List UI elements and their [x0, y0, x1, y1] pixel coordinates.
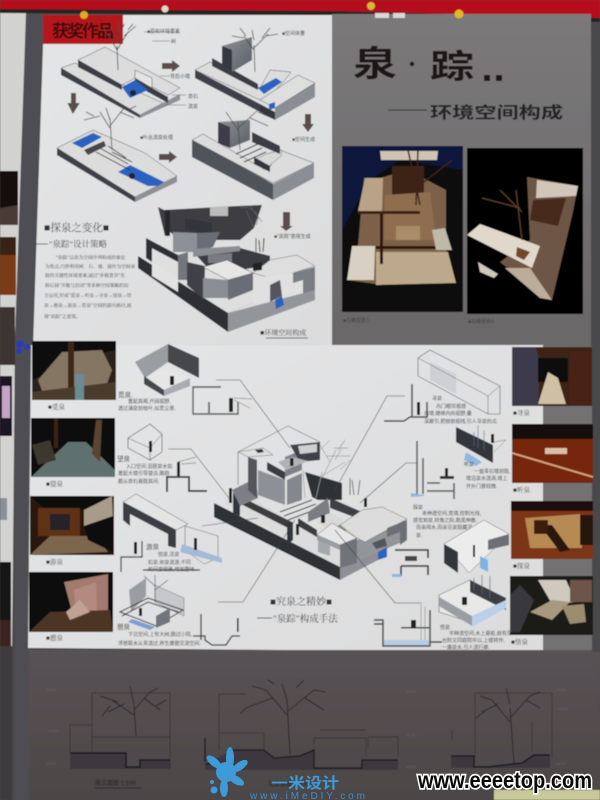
vignette: 望泉: 置起大墙引导望点,路趋 — [118, 470, 169, 477]
vignette: 听泉: 听泉 — [464, 461, 474, 468]
subtitle: 环境空间构成 — [430, 103, 563, 122]
vignette: 寻泉: 内墙,继续内向视野,叠 — [424, 410, 472, 417]
left photo captions: ■觅泉 — [48, 402, 65, 411]
vignette: 游泉 — [121, 494, 222, 573]
right photo captions: ■悟泉 — [511, 637, 528, 646]
vignette: 悟泉: 半种流空间,水上悬桩,前有深 — [449, 630, 512, 637]
grey chips beside the right photos — [543, 346, 593, 650]
vignette: 游泉: 悦泉,活泉 — [158, 551, 179, 558]
left photo captions: ■望泉 — [46, 479, 63, 488]
left photo captions: ■游泉 — [46, 557, 63, 566]
elevation 2 — [205, 680, 398, 788]
vignette: 悟泉: 台阶又同庭院中以,上楼转作, — [442, 637, 505, 644]
right photo captions: ■听泉 — [513, 485, 530, 494]
central axonometric model — [214, 426, 407, 580]
photo: bird's-eye model 4 — [467, 148, 583, 314]
level annotations: ±2.60 — [406, 732, 417, 737]
level annotations: ±5.00 — [406, 689, 417, 694]
level annotations: ±5.00 — [556, 687, 567, 692]
watermark: 一米设计: 一米设计 — [271, 775, 339, 792]
level annotations: ±3.60 — [558, 706, 569, 711]
arrow down 2 — [302, 114, 314, 132]
diagram 4: volume generated — [192, 110, 315, 200]
strategy paragraph: 现"泉踪"之意境。 — [44, 313, 81, 320]
white lower board — [28, 345, 543, 652]
diagram 2: space volume — [195, 28, 315, 120]
vignette: 望泉: 入口空间,泪居泉水如 — [126, 463, 172, 470]
pins — [16, 2, 464, 354]
award label — [43, 15, 123, 44]
vignette: 寻泉: 内门眼帘视感 — [436, 403, 466, 410]
vignette: 望泉: 望泉 — [117, 454, 130, 463]
right wall strip — [592, 22, 600, 652]
vignette: 听泉 — [456, 425, 510, 490]
vignette: 游泉: 游泉 — [146, 542, 160, 551]
white upper board — [33, 15, 332, 346]
annotations of diagram 1: 树 — [171, 38, 176, 45]
caption: 环境空间构成: ■环境空间构成 — [260, 328, 306, 337]
vignette: 憩泉: 浮想联水从青流过,养生康憩交流空间. — [118, 640, 201, 647]
photo: 探泉 — [511, 501, 593, 559]
level annotations — [46, 687, 569, 769]
label: 意境生成: ■"泉踪"意境生成 — [274, 233, 311, 240]
vignette: 听泉: 墙沿泉水流淌,墙上 — [466, 475, 507, 482]
level annotations: ±5.00 — [46, 687, 57, 692]
vignette: 觅泉 — [118, 344, 252, 414]
vignette: 望泉: 都从奇石悬隐其间. — [118, 478, 159, 485]
vignette: 寻泉: 寻泉 — [432, 395, 442, 402]
left photo captions — [46, 402, 65, 642]
vignette: 悟泉 — [374, 575, 512, 651]
photo: 悟泉 — [510, 576, 593, 635]
level annotations: ±3.60 — [48, 728, 59, 733]
diagram 3: site with steps and pool — [57, 106, 177, 202]
vignette: 听泉: 一面青石墙前隐, — [474, 468, 510, 475]
vignette: 探泉 section: 而亲闻水,而亲见泉隐藏灵 — [416, 524, 472, 531]
elevation 3 — [451, 688, 552, 768]
paper tag on top of panel — [375, 13, 405, 18]
level annotations: ±0.00 — [556, 761, 567, 766]
annotations of diagram 1: 背后小墙 — [170, 73, 190, 80]
heading: 探泉之变化: ■探泉之变化■ — [44, 221, 109, 234]
title: 泉 — [353, 45, 397, 84]
vignette: 觅泉: 置起高阁,开阔视野, — [128, 398, 171, 405]
vignette: 探泉 axonometric — [444, 520, 509, 573]
vignette: 寻泉: 深廊引,把前前视线,引人寻泉的点. — [424, 418, 498, 425]
photo: 望泉 — [31, 418, 115, 477]
yellow note at bottom right — [494, 790, 600, 800]
strategy paragraph: "泉踪"以泉为空间序列构成的象征 — [56, 254, 126, 261]
captions: model views — [343, 317, 494, 325]
vignette: 憩泉: 下沉空间,上有大树,跑过小院, — [128, 631, 192, 638]
vignette: 寻泉 — [384, 350, 500, 425]
vignette: 游泉: 的尺度很景,增加趣味. — [148, 566, 196, 573]
vignette: 觅泉: 觅泉. — [118, 390, 133, 399]
left photo captions: ■憩泉 — [46, 633, 63, 642]
elevation 1: 南立面图 1:100 — [95, 779, 136, 787]
heading: 设计策略: "泉踪"设计策略 — [49, 239, 107, 249]
strategy paragraph: 接的关键性环境要素,通过"步移景异"先 — [45, 272, 125, 279]
vignette: 憩泉 — [117, 575, 240, 647]
watermark logo: blue splash — [205, 747, 250, 797]
strategy paragraph — [44, 254, 136, 320]
photo: bird's-eye model 3 — [342, 146, 463, 312]
diagram 2: space volume: ■空间体量 — [282, 30, 305, 37]
leader lines — [168, 380, 420, 603]
strategy paragraph: 合运用,形成"觅泉→听泉→寻泉→探泉→悟 — [44, 292, 132, 299]
vignette: 探泉 section: 本伸透空间,竟墙,控制光线, — [422, 510, 481, 517]
vignette: 听泉: 开外门景较微. — [466, 483, 497, 490]
vignette: 悟泉: 一廉泉水,引人流行廊. — [442, 644, 490, 651]
annotations of diagram 1: ■原有环境要素 — [147, 28, 180, 35]
arrow right 1 — [162, 60, 180, 72]
elevation 1 — [70, 686, 170, 788]
vignette: 探泉 section detail — [392, 550, 428, 577]
diagram 5: composed environment — [138, 205, 315, 332]
diagram 4: volume generated: ■空间生成 — [292, 136, 315, 143]
vignette: 探泉 section: 泉. — [416, 532, 422, 539]
arrow down 3 — [280, 212, 293, 231]
annotations of diagram 1: 奇石 — [188, 93, 198, 100]
strategy paragraph: 泉→憩泉→游泉→赏泉"空间的游历路径,展 — [44, 302, 132, 309]
right photo captions — [511, 408, 530, 646]
grey display post — [14, 12, 43, 800]
vignette: 觅泉: 透过涌泉前枝叶,似觅尘景. — [118, 405, 176, 412]
vignette: 望泉 — [117, 424, 207, 492]
strategy paragraph: 为焦点,巧妙利用树、石、墙、涌作为空间承 — [45, 263, 136, 270]
title: 踪 — [430, 48, 474, 85]
photo: 觅泉 — [32, 341, 116, 400]
level annotations: ±0.00 — [406, 764, 417, 769]
photo: 寻泉 — [512, 347, 592, 406]
heading: 究泉之精妙: ■究泉之精妙■ — [270, 595, 332, 608]
heading: 构成手法: "泉踪"构成手法 — [273, 613, 338, 625]
red top rail — [0, 0, 600, 22]
captions: model views: ■鸟瞰视景3 — [343, 317, 369, 324]
heading: 构成手法 — [257, 613, 338, 625]
level annotations: ±0.00 — [46, 761, 57, 766]
diagram 1: site with tree and pool — [61, 22, 186, 118]
diagram 3: site with steps and pool: ■叶丛流泉处理 — [140, 134, 173, 141]
award label: 获奖作品 — [52, 21, 114, 41]
vignette: 悟泉: 悟泉 — [440, 624, 450, 631]
photo: 憩泉 — [29, 572, 113, 632]
title — [353, 45, 502, 85]
elevation 2: 北立面图 1:100 — [268, 780, 309, 788]
strategy paragraph: 抑后扬"开敞与封闭"等多种空间策略的综 — [45, 282, 129, 289]
vignette: 憩泉: 憩泉 — [117, 622, 130, 631]
vignette: 探泉 section — [411, 441, 481, 539]
annotations of diagram 1: 流泉 — [188, 103, 198, 110]
grey title panel — [332, 14, 591, 346]
bottom elevations panel — [29, 650, 600, 800]
photo: 听泉 — [512, 424, 593, 483]
annotations of diagram 1 — [147, 28, 198, 110]
vignette: 游泉: 扣泉,依泉流游,不同 — [148, 559, 191, 566]
left neighbouring poster strip — [0, 13, 26, 800]
arrow right 2 — [159, 151, 177, 163]
right photo captions: ■探泉 — [513, 561, 530, 570]
captions: model views: ■鸟瞰视景4 — [468, 318, 494, 325]
vignette: 探泉 section: 感觉到泉,转角之际,勘黑伸散, — [413, 517, 477, 524]
photo: 游泉 — [30, 496, 114, 555]
arrow down 1 — [69, 94, 78, 112]
vignette: 探泉 section: 探泉 — [413, 504, 423, 511]
right photo captions: ■寻泉 — [513, 408, 530, 417]
